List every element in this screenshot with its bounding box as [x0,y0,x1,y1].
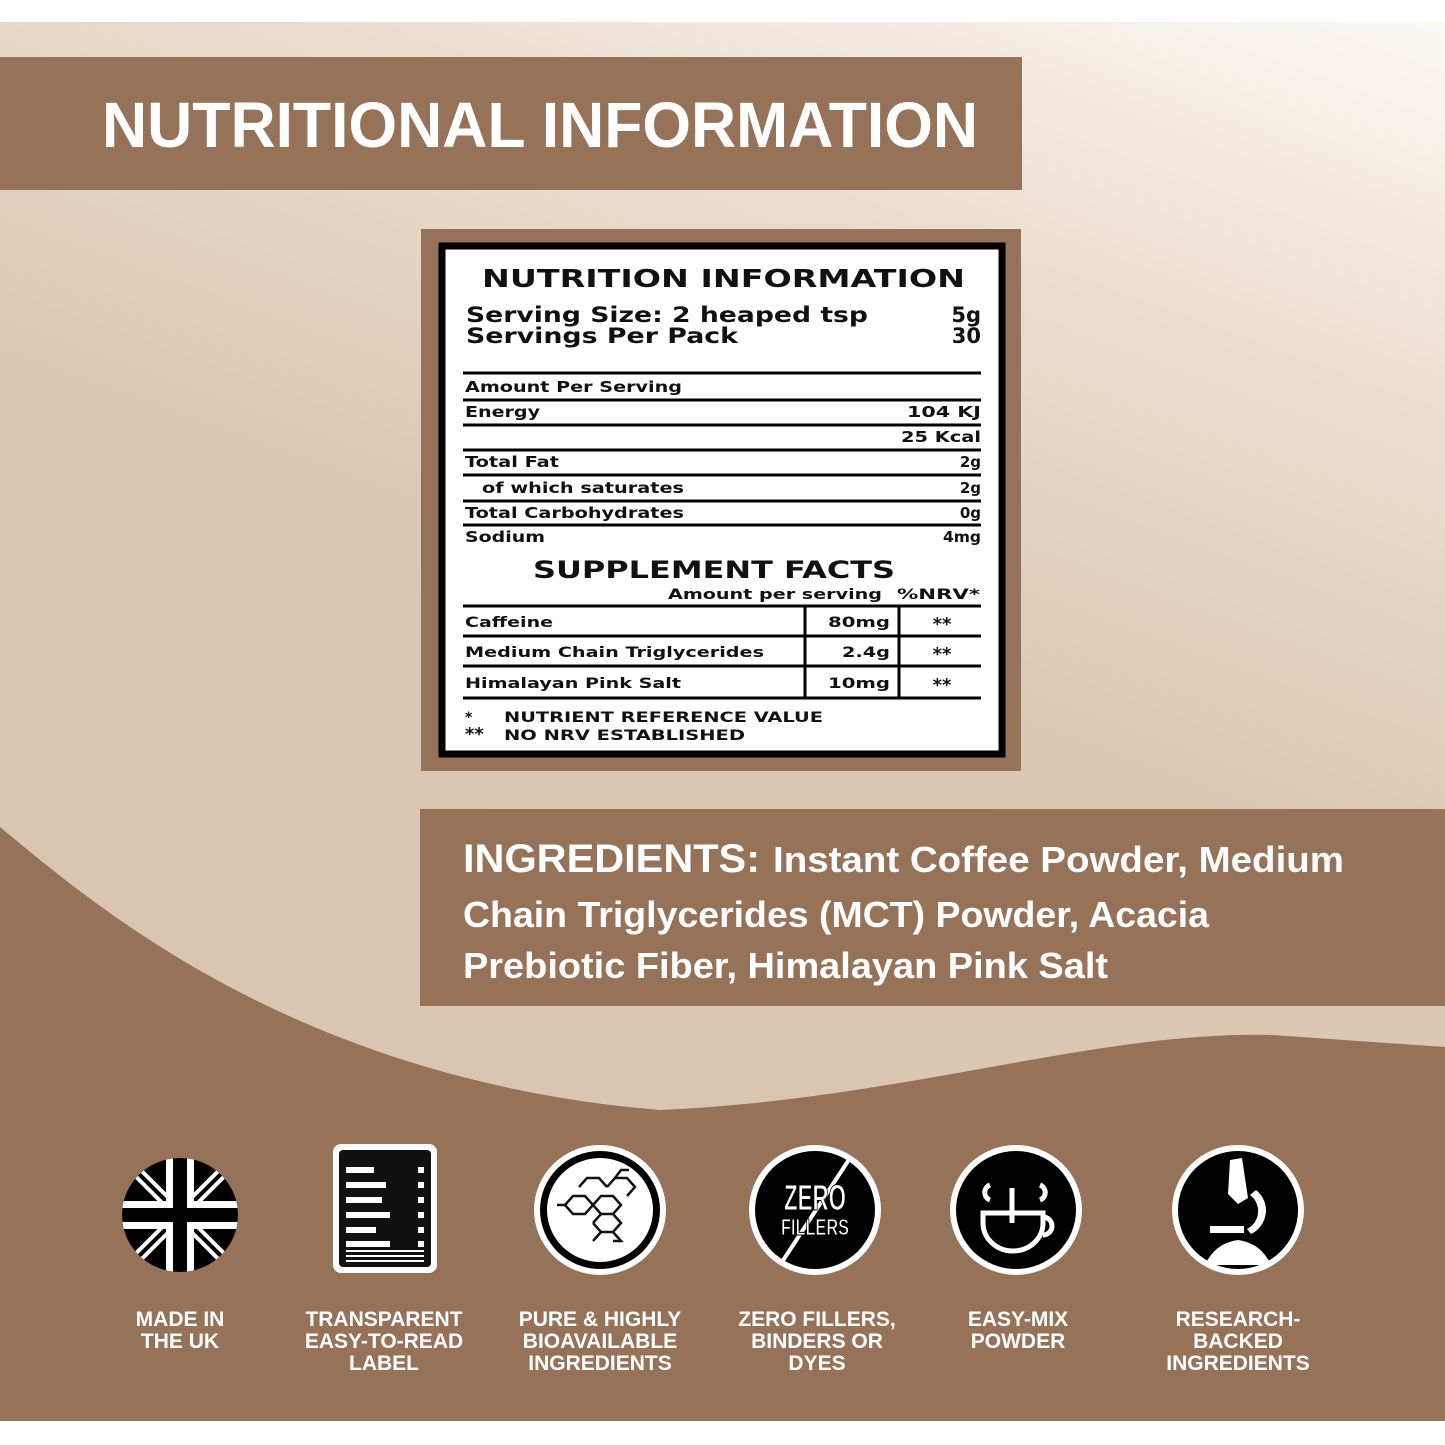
panel: ingredients: Instant Coffee Powder, Medium [773,839,1344,880]
label: easy mix: EASY-MIX [968,1308,1068,1331]
label: pure: BIOAVAILABLE [523,1330,677,1353]
serving info: 30 [952,324,981,348]
label: zero fillers: DYES [788,1352,846,1375]
panel: nutrition label: %NRV* [897,587,981,603]
label: research: BACKED [1193,1330,1283,1353]
label heading: NUTRITION INFORMATION [482,264,965,293]
panel: nutrition label: ** [933,644,952,665]
icon: UK flag [122,1158,238,1272]
panel: nutrition label: Energy [465,403,540,421]
serving info [466,303,981,348]
label: made in uk [136,1308,224,1353]
label: made in uk: THE UK [141,1330,219,1353]
serving info: 5g [951,303,981,327]
icon: microscope [1172,1145,1304,1275]
panel: nutrition label: Caffeine [465,615,553,631]
panel: nutrition label [421,229,1021,771]
panel: nutrition label: 25 Kcal [901,428,981,446]
icon: zero fillers: ZERO [784,1177,846,1218]
label: transparent: TRANSPARENT [305,1308,463,1331]
label: zero fillers [738,1308,896,1375]
icons row [122,1144,1304,1275]
panel: nutrition label: 2g [960,453,981,471]
label: made in uk: MADE IN [136,1308,224,1331]
title banner: NUTRITIONAL INFORMATION [102,89,978,161]
label: zero fillers: ZERO FILLERS, [738,1308,896,1331]
panel: nutrition label: 4mg [943,528,981,546]
serving info: Servings Per Pack [466,324,739,348]
icon: easy mix [950,1145,1082,1275]
label: transparent: EASY-TO-READ [305,1330,463,1353]
panel: ingredients: Prebiotic Fiber, Himalayan Pink Salt [463,945,1108,986]
supplement facts: SUPPLEMENT FACTS [533,556,895,584]
label: transparent: LABEL [349,1352,419,1375]
icon: molecule [534,1145,666,1275]
title banner [0,57,1022,190]
label: pure: INGREDIENTS [528,1352,672,1375]
label: easy mix: POWDER [971,1330,1065,1353]
panel: nutrition label: ** [933,675,952,696]
label: research [1166,1308,1310,1375]
label: zero fillers: BINDERS OR [751,1330,883,1353]
panel: nutrition label: 104 KJ [907,403,981,421]
panel: nutrition label: ** [465,724,484,745]
panel: nutrition label: * [465,710,473,726]
panel: nutrition label: Amount Per Serving [465,378,682,396]
panel: nutrition label: 2g [960,479,981,497]
label: easy mix [968,1308,1068,1353]
panel: ingredients [420,809,1445,1006]
serving info: Serving Size: 2 heaped tsp [466,303,868,327]
panel: nutrition label: NO NRV ESTABLISHED [504,728,745,744]
panel: nutrition label: 2.4g [842,645,890,661]
icon: zero fillers: FILLERS [781,1214,849,1240]
icon: zero fillers [749,1145,881,1275]
label: research: INGREDIENTS [1166,1352,1310,1375]
panel: nutrition label: NUTRIENT REFERENCE VALUE [504,710,823,726]
feature labels [136,1308,1310,1375]
label: research: RESEARCH- [1176,1308,1300,1331]
label: pure [519,1308,681,1375]
panel: nutrition label: Sodium [465,528,545,546]
panel: ingredients: INGREDIENTS: [463,837,760,881]
nutrition rows [463,373,981,698]
label: pure: PURE & HIGHLY [519,1308,681,1331]
panel: nutrition label: Amount per serving [668,587,882,603]
panel: ingredients: Chain Triglycerides (MCT) Powder, Acacia [463,894,1210,935]
panel: nutrition label: Himalayan Pink Salt [465,676,681,692]
icon: label document [333,1144,437,1273]
panel: nutrition label: 0g [960,504,981,522]
panel: nutrition label: Total Carbohydrates [465,504,684,522]
panel: nutrition label: of which saturates [482,479,684,497]
panel: nutrition label: 10mg [828,676,890,692]
label: transparent [305,1308,463,1375]
panel: nutrition label: Medium Chain Triglycerides [465,645,764,661]
panel: nutrition label: ** [933,614,952,635]
panel: nutrition label: Total Fat [465,453,559,471]
panel: nutrition label: 80mg [828,615,890,631]
